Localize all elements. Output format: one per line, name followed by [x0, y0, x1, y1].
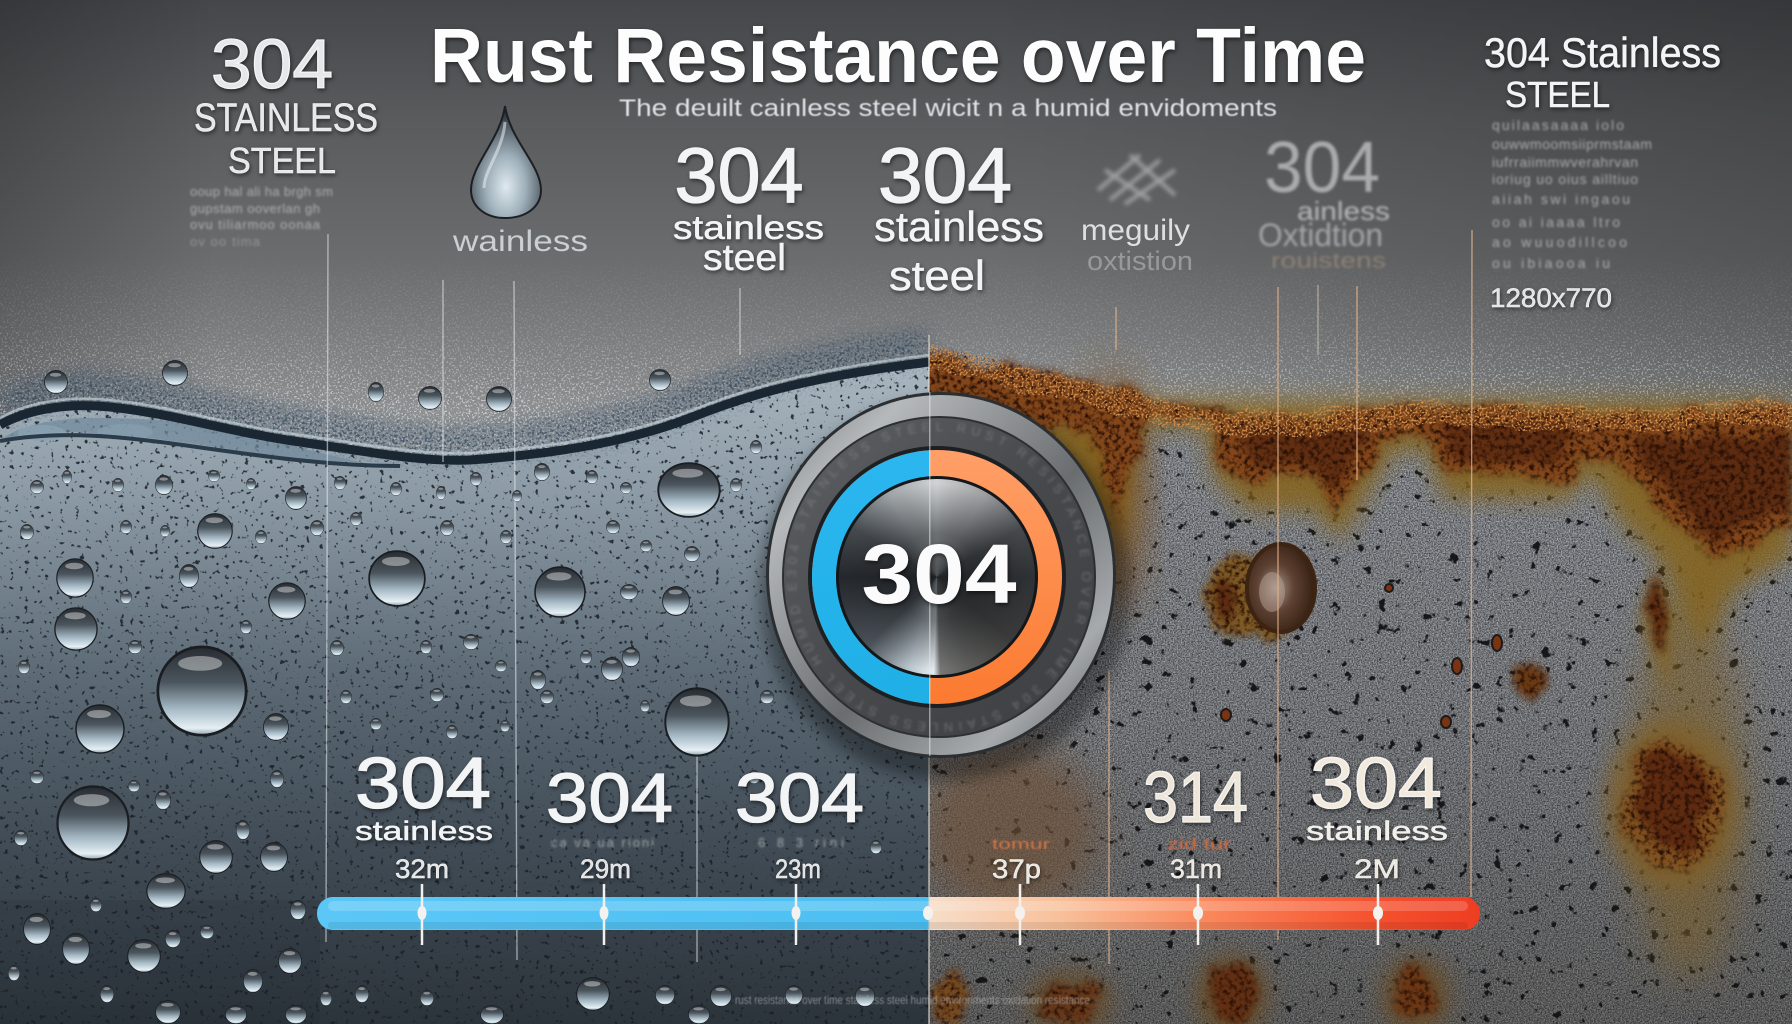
water droplets	[8, 361, 882, 1024]
icon: water drop	[471, 106, 541, 218]
panel: rusted steel side	[929, 345, 1792, 1024]
timeline label 5	[1143, 758, 1248, 884]
small copy column: quilaasaaaa iolo	[1492, 117, 1624, 133]
label block: second 304 stainless steel: steel	[889, 252, 985, 299]
timeline label 1: stainless	[355, 816, 493, 846]
small copy column: ou ibiaooa iu	[1492, 255, 1610, 271]
blurred small copy: ooup hal ali ha brgh sm	[190, 184, 333, 199]
label block: top left 304 stainless steel: STAINLESS	[194, 96, 378, 140]
label block: meguily oxidation: meguily	[1081, 214, 1190, 247]
timeline label 5: 314	[1143, 758, 1248, 838]
dial value: 304	[862, 527, 1017, 621]
label block: center 304 stainless steel: 304	[674, 131, 804, 219]
panel: wet stainless steel side	[0, 362, 929, 1024]
timeline label 6: 304	[1310, 744, 1442, 824]
timeline label 6: 2M	[1354, 854, 1400, 884]
thin vertical guide lines	[326, 230, 1472, 964]
label block: right 304 stainless steel: 304 Stainless	[1484, 29, 1721, 76]
label block: fading 304 oxidation resistance: rouistens	[1271, 248, 1386, 273]
blurred small copy: gupstam ooverlan gh	[190, 201, 320, 216]
timeline label 4: tomur	[992, 836, 1050, 853]
label block: center 304 stainless steel: stainless	[673, 209, 824, 246]
timeline label 4: 37p	[992, 854, 1041, 884]
label block: fading 304 oxidation resistance: Oxtidtion	[1258, 217, 1383, 253]
dial outer rim	[766, 392, 1116, 758]
timeline markers	[418, 884, 1383, 945]
timeline label 5: 31m	[1170, 854, 1222, 884]
timeline label 4	[992, 836, 1050, 884]
speckled rust crust along edge	[929, 358, 1792, 426]
label block: top left 304 stainless steel	[190, 25, 378, 249]
small copy column: ioriug uo oius ailltiuo	[1492, 171, 1638, 187]
label block: center 304 stainless steel	[673, 131, 824, 278]
label block: fading 304 oxidation resistance	[1258, 128, 1390, 273]
background: upper grey steel panel	[0, 0, 1792, 480]
timeline label 6	[1306, 744, 1448, 884]
rusty pits	[1221, 584, 1502, 728]
label block: right 304 stainless steel: STEEL	[1505, 74, 1610, 115]
timeline label 3	[735, 759, 864, 884]
timeline bar	[317, 884, 1480, 945]
dial inner channel	[782, 416, 1096, 738]
label block: top left 304 stainless steel: STEEL	[228, 140, 336, 181]
label block: fading 304 oxidation resistance: ainless	[1297, 196, 1390, 226]
small copy column: aiiah swi ingaou	[1492, 191, 1630, 207]
timeline label 3: 304	[735, 759, 864, 837]
timeline label 1	[355, 744, 493, 884]
blurred small copy: ovu tiliarmoo oonaa	[190, 217, 321, 232]
dial progress ring	[812, 450, 1062, 704]
rust patch: spots	[932, 555, 1544, 1024]
corrosion nodule	[1247, 544, 1315, 632]
rust patch: small streak	[1642, 572, 1668, 655]
water surface wave	[0, 342, 929, 466]
dial engraved ring text	[796, 431, 1082, 723]
blurred small copy: ov oo tima	[190, 234, 261, 249]
central 304 dial badge	[752, 392, 1138, 787]
blurred small copy	[190, 184, 333, 249]
label block: right 304 stainless steel: 1280x770	[1490, 283, 1612, 313]
speckled humid mist band	[0, 275, 1792, 456]
timeline label 2	[546, 759, 673, 884]
rust patch: lower right	[1622, 741, 1722, 869]
small copy column	[1492, 117, 1652, 271]
timeline label 1: 304	[355, 744, 491, 824]
label block: top left 304 stainless steel: 304	[211, 25, 333, 103]
label block: second 304 stainless steel: 304	[878, 131, 1012, 219]
rust band and rust patches	[900, 347, 1792, 1024]
timeline label 3: 6 8 3 rini	[758, 835, 844, 850]
subtitle: The deuilt cainless steel wicit n a humid envidoments	[619, 95, 1277, 122]
dial dark bevel	[808, 446, 1066, 708]
icon: corroded scribble	[1098, 155, 1175, 204]
timeline label 2: ca va ua rioni	[551, 835, 654, 850]
central 304 dial badge: 304 STAINLESS STEEL RUST RESISTANCE OVER TIME 304 STAINLESS STEEL HUMID ENVIRONMENTS	[787, 422, 1092, 732]
timeline label 3: 23m	[775, 854, 821, 884]
dial metal disc	[839, 479, 1035, 675]
timeline label 2: 304	[546, 759, 673, 837]
small copy column: ao wuuodillcoo	[1492, 234, 1627, 250]
label block: center 304 stainless steel: steel	[703, 237, 786, 278]
small copy column: ouwwmoomsiiprmstaam	[1492, 136, 1652, 152]
label block: meguily oxidation	[1081, 155, 1193, 276]
split line	[928, 335, 930, 1024]
faint footer text: rust resistance over time stainless steel humid environments oxidation resistance	[735, 993, 1090, 1007]
label block: meguily oxidation: oxtistion	[1087, 246, 1193, 276]
small copy column: oo ai iaaaa ltro	[1492, 214, 1620, 230]
title: Rust Resistance over Time	[430, 13, 1366, 99]
label block: second 304 stainless steel: stainless	[874, 203, 1044, 250]
rust haze	[920, 370, 1792, 1024]
label: wainless: wainless	[452, 225, 588, 258]
timeline label 1: 32m	[395, 854, 449, 884]
small copy column: iufrraiimmwverahrvan	[1492, 154, 1638, 170]
timeline label 5: zid tur	[1167, 836, 1231, 853]
label block: second 304 stainless steel	[874, 131, 1044, 299]
label block: right 304 stainless steel	[1484, 29, 1721, 313]
timeline label 2: 29m	[580, 854, 631, 884]
timeline label 6: stainless	[1306, 816, 1448, 846]
label block: fading 304 oxidation resistance: 304	[1264, 128, 1380, 208]
